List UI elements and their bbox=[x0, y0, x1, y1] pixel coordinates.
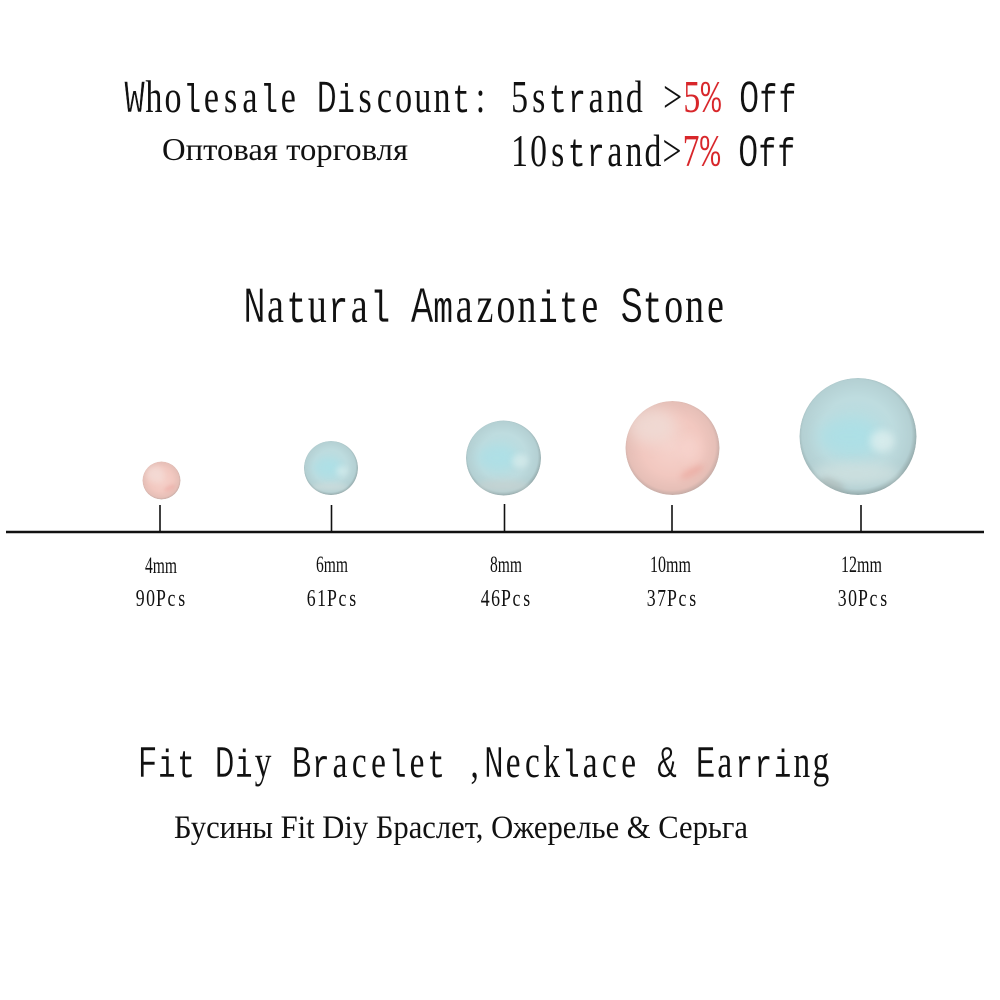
label: 10mm 37Pcs: 10mm bbox=[650, 552, 691, 577]
russian wholesale caption: Оптовая торговля bbox=[162, 131, 408, 167]
discount heading: Wholesale Discount: bbox=[124, 71, 485, 127]
label: 4mm 90Pcs: 90Pcs bbox=[136, 584, 185, 612]
label: 6mm 61Pcs: 61Pcs bbox=[307, 584, 356, 612]
label: 6mm 61Pcs bbox=[307, 552, 356, 612]
bead: 8mm bbox=[466, 420, 541, 496]
label: 8mm 46Pcs: 46Pcs bbox=[481, 584, 530, 612]
russian usage caption: Бусины Fit Diy Браслет, Ожерелье & Серьга bbox=[174, 810, 748, 846]
bead: 4mm bbox=[142, 462, 180, 500]
5 strand discount: 5strand >5% Off bbox=[511, 71, 796, 127]
bead: 10mm bbox=[626, 401, 720, 495]
size scale axis with ticks bbox=[6, 504, 984, 532]
bead: 12mm bbox=[800, 378, 916, 495]
label: 12mm 30Pcs: 12mm bbox=[841, 552, 882, 577]
bead: 6mm bbox=[304, 441, 358, 495]
label: 12mm 30Pcs bbox=[838, 552, 887, 612]
label: 6mm 61Pcs: 6mm bbox=[316, 552, 348, 577]
label: 8mm 46Pcs bbox=[481, 552, 530, 612]
usage heading: Fit Diy Bracelet ,Necklace & Earring bbox=[138, 737, 830, 791]
label: 10mm 37Pcs: 37Pcs bbox=[647, 584, 696, 612]
product title: Natural Amazonite Stone bbox=[243, 277, 724, 338]
10 strand discount: 10strand>7% Off bbox=[511, 125, 795, 181]
label: 10mm 37Pcs bbox=[647, 552, 696, 612]
label: 12mm 30Pcs: 30Pcs bbox=[838, 584, 887, 612]
label: 4mm 90Pcs bbox=[136, 553, 185, 612]
label: 8mm 46Pcs: 8mm bbox=[490, 552, 522, 577]
label: 4mm 90Pcs: 4mm bbox=[145, 553, 177, 578]
